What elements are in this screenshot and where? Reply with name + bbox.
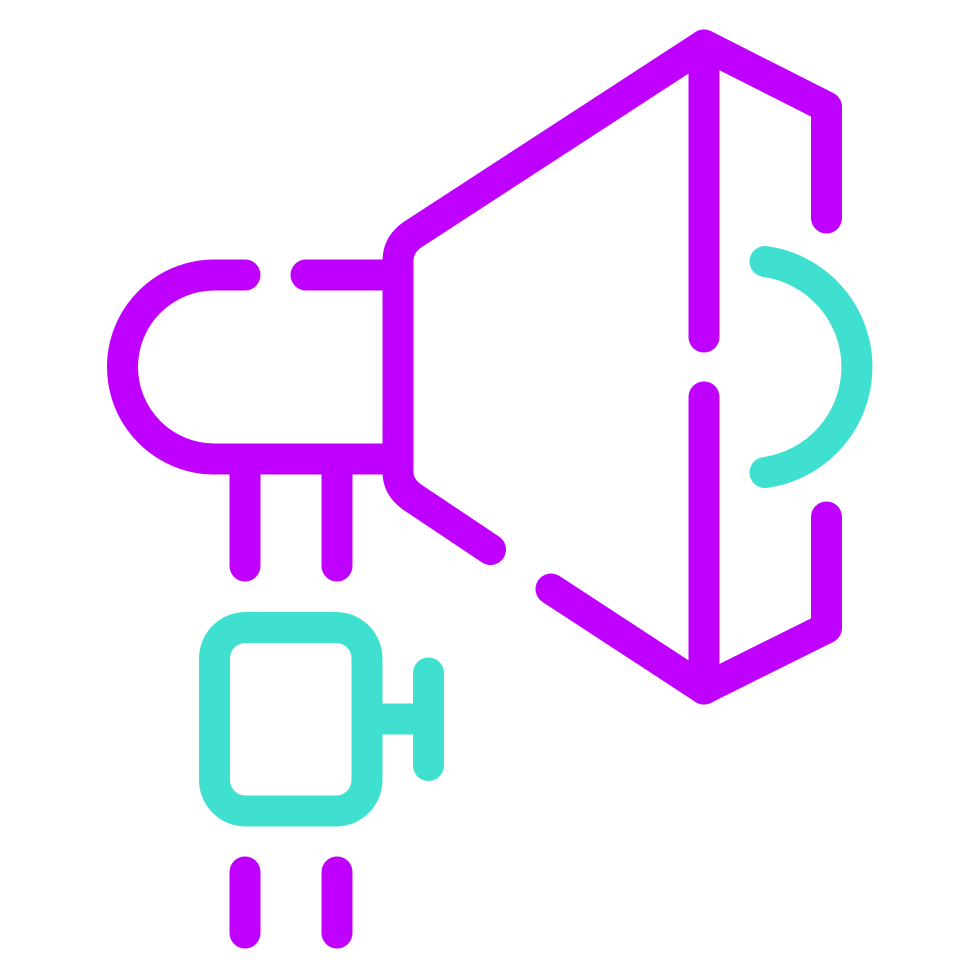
horn inner divider — [688, 45, 720, 689]
teal mount block — [214, 628, 428, 811]
megaphone handle — [122, 275, 398, 459]
handle legs — [245, 459, 337, 566]
sound wave arc — [765, 262, 857, 472]
megaphone horn outline — [398, 45, 826, 689]
lower dashes — [245, 872, 337, 933]
